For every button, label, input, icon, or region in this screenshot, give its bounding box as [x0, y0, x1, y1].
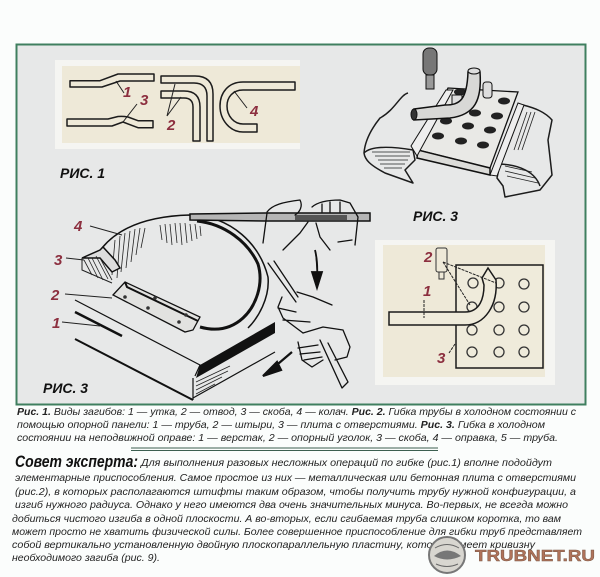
- tube: outer elbow: [161, 76, 213, 141]
- tube: inner elbow: [161, 91, 200, 141]
- double divider: [131, 448, 438, 450]
- label: numbers: 3: [437, 350, 446, 367]
- label: numbers: 4: [249, 103, 259, 120]
- bent tube: [389, 268, 496, 325]
- caption text: помощью опорной панели: 1 — труба, 2 — штыри, 3 — плита с отверстиями. Рис. 3. Гибка в холодном: [17, 419, 545, 431]
- plate: [456, 265, 543, 368]
- label: РИС. 3 bottom: РИС. 3: [43, 380, 88, 396]
- upper left hand: [263, 200, 308, 250]
- label: numbers: 4: [73, 218, 83, 235]
- bending bar lower: [320, 340, 348, 388]
- panel: illustration frame: [16, 44, 586, 404]
- lower second hand: [298, 327, 350, 367]
- upper right hand: [312, 200, 358, 250]
- expert advice block: может просто не хватить физической силы. Более совершенное приспособление для гибки труб представляет: [12, 526, 582, 538]
- label: numbers: [50, 218, 83, 332]
- leader lines: [116, 81, 181, 122]
- clamp 3: [82, 247, 120, 272]
- label: numbers: 1: [423, 283, 431, 300]
- tube: U bend 4: [220, 82, 295, 132]
- tube: [190, 213, 370, 221]
- label: numbers: 3: [54, 252, 63, 269]
- panel: figure 1 bend types: [55, 60, 300, 149]
- arrow: diagonal: [263, 352, 292, 376]
- expert advice block: [12, 452, 582, 564]
- leader lines: [62, 226, 122, 326]
- expert advice block: Для выполнения разовых несложных операций по гибке (рис.1) вполне подойдут: [140, 457, 552, 469]
- expert advice block: собой вертикально установленную двойную плоскопараллельную пластину, которая имеет кривизну: [12, 539, 536, 551]
- hands on tube: [263, 200, 358, 367]
- label: РИС. 1: РИС. 1: [60, 165, 105, 181]
- lower hand: [278, 292, 332, 333]
- left cloth: [364, 93, 415, 183]
- label: numbers: 1: [52, 315, 60, 332]
- pin: [436, 248, 447, 279]
- watermark: TRUBNET.RU: [475, 548, 595, 565]
- caption text: Рис. 1. Виды загибов: 1 — утка, 2 — отвод, 3 — скоба, 4 — колач. Рис. 2. Гибка трубы в холодном состоянии с: [17, 406, 577, 418]
- label: numbers: [423, 249, 446, 367]
- expert advice block: необходимого загиба (рис. 9).: [12, 552, 160, 564]
- figure: plate with holes: [375, 240, 555, 385]
- arrow: downward: [312, 250, 322, 288]
- plate holes: [432, 88, 510, 148]
- label: numbers: [123, 84, 259, 134]
- plate: [418, 88, 518, 168]
- bending bar upper: [268, 261, 298, 302]
- tube: offset bend 3: [67, 116, 153, 128]
- label: numbers: 3: [140, 92, 149, 109]
- caption text: [17, 406, 577, 444]
- label: numbers: 2: [50, 287, 60, 304]
- figure: plate clamped to bench (top right): [364, 48, 552, 197]
- expert advice block: добиться чистого изгиба в одной плоскости. А во-вторых, если сгибаемая труба слишком коротка, то вам: [12, 513, 561, 525]
- support angle 2: [113, 282, 200, 332]
- label: РИС. 3 top: РИС. 3: [413, 208, 458, 224]
- loose pin: [423, 48, 437, 89]
- right cloth: [497, 105, 552, 197]
- label: numbers: 1: [123, 84, 131, 101]
- label: numbers: 2: [423, 249, 433, 266]
- mandrel hatching: [160, 223, 201, 245]
- expert advice block: элементарные приспособления. Самое простое из них — металлическая или бетонная плита с отверстиями: [15, 472, 576, 484]
- workbench: [75, 300, 200, 376]
- holes: [467, 278, 529, 357]
- tube: offset bend 1: [70, 74, 154, 87]
- bent tube: [414, 72, 480, 120]
- label: numbers: 2: [166, 117, 176, 134]
- pins: [483, 82, 492, 98]
- leader lines: [424, 262, 496, 353]
- expert advice block: изгиб нужного радиуса. Однако у него имеются два очень значительных минуса. Во-первых, не всегда можно: [15, 499, 568, 511]
- caption text: состоянии на неподвижной оправе: 1 — верстак, 2 — опорный уголок, 3 — скоба, 4 — оправка, 5 — труба.: [17, 432, 558, 444]
- expert advice block: (рис.2), в которых располагаются штифты таким образом, чтобы получить трубу нужной конфигурации, а: [15, 486, 576, 498]
- heading: Совет эксперта:: [15, 452, 138, 471]
- watermark: [429, 537, 595, 573]
- mandrel rim: [102, 215, 268, 328]
- clamps: [411, 90, 453, 156]
- figure: bending on fixed mandrel: [50, 200, 370, 400]
